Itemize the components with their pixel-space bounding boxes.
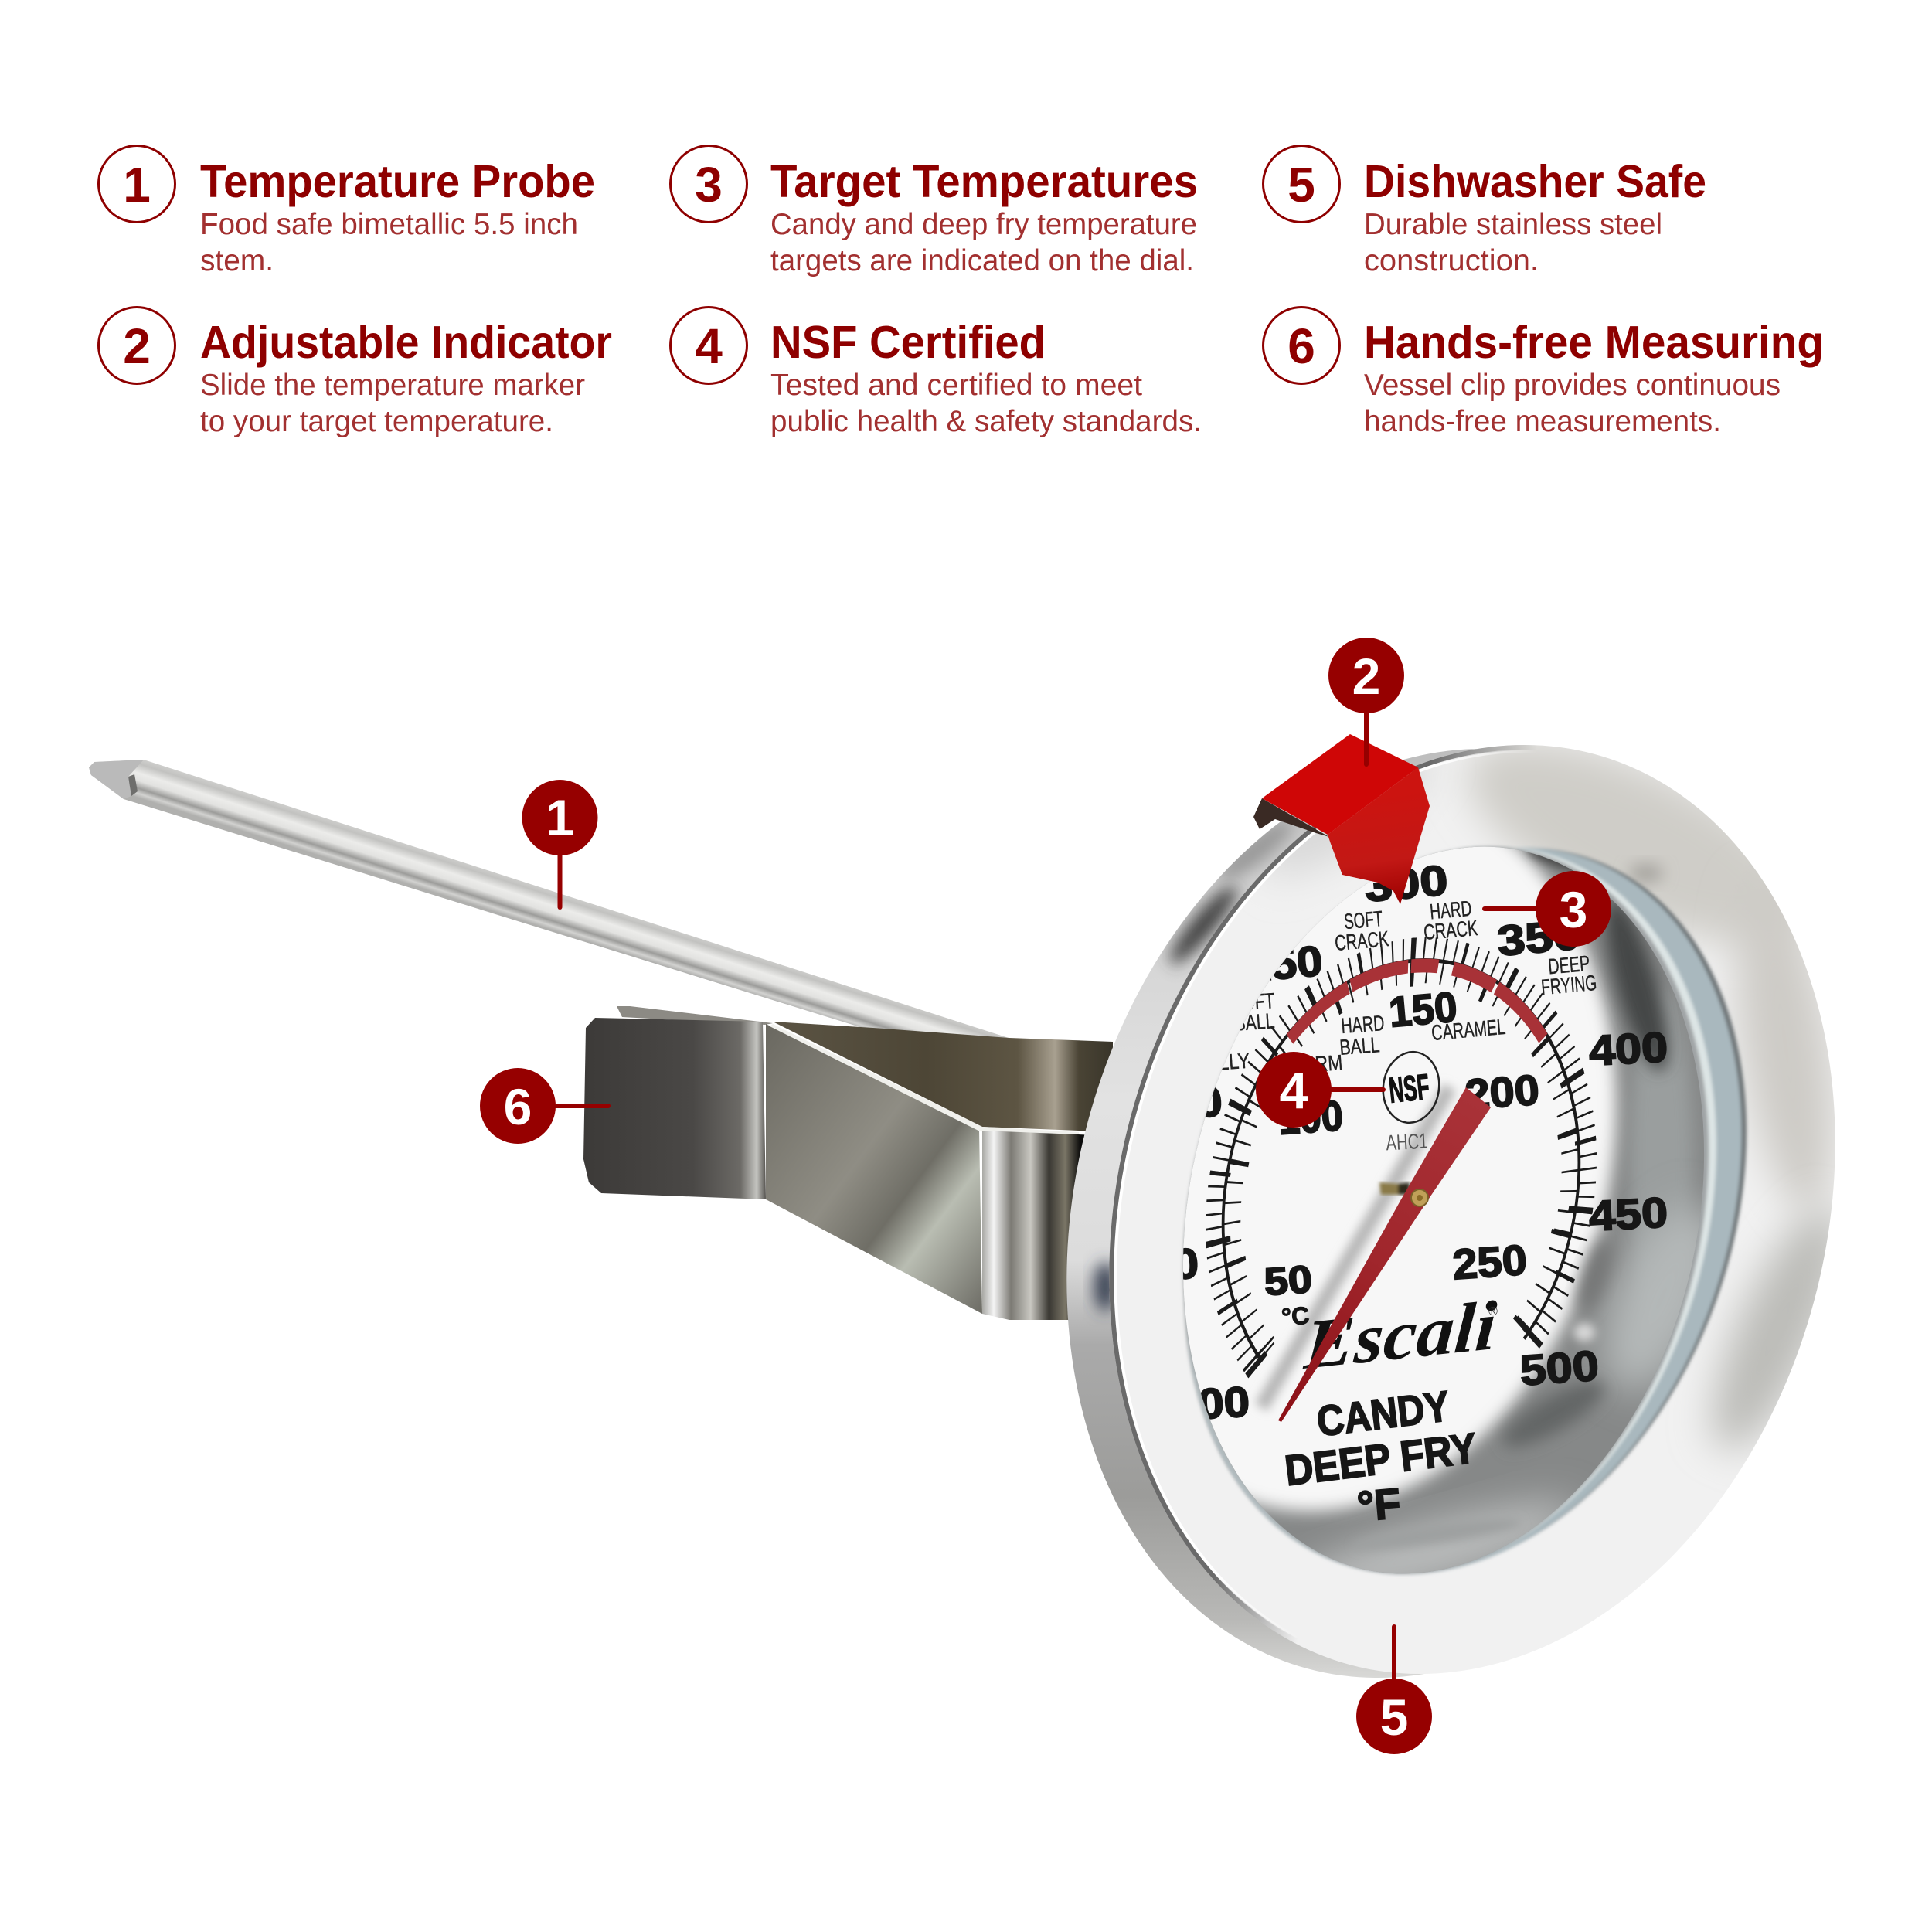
callout 6: 6 — [504, 1078, 532, 1135]
Escali brand logo: Escali — [1301, 1286, 1499, 1384]
candy stage labels: HARD — [1429, 896, 1472, 923]
feature list — [99, 145, 1824, 438]
front bezel — [1109, 745, 1835, 1674]
red adjustable marker — [1253, 734, 1430, 904]
heading: Dishwasher Safe: Dishwasher Safe — [1364, 156, 1706, 207]
fahrenheit and celsius numerals: °C — [1281, 1301, 1310, 1331]
description: Vessel clip provides continuous — [1364, 369, 1781, 402]
callout 4 — [1256, 1052, 1383, 1128]
fahrenheit and celsius numerals: 500 — [1519, 1342, 1600, 1395]
candy stage labels: SOFT — [1343, 906, 1383, 934]
number circle 1 — [99, 145, 175, 223]
description: Slide the temperature marker — [200, 369, 585, 402]
fahrenheit and celsius numerals: 450 — [1587, 1188, 1669, 1240]
heading: Target Temperatures: Target Temperatures — [770, 156, 1198, 207]
description: targets are indicated on the dial. — [770, 244, 1194, 277]
candy stage labels: HARD — [1340, 1011, 1385, 1038]
feature 3: target temperatures — [671, 145, 1198, 277]
description: public health & safety standards. — [770, 405, 1202, 438]
infographic canvas — [89, 145, 1835, 1754]
pivot pin — [1379, 1182, 1410, 1195]
candy stage labels: CRACK — [1334, 927, 1390, 955]
description: to your target temperature. — [200, 405, 553, 438]
candy stage labels: JELLY — [1196, 1049, 1251, 1076]
dial title — [1285, 1389, 1475, 1521]
number circle 5 — [1263, 145, 1340, 223]
fahrenheit and celsius numerals: 350 — [1495, 910, 1583, 965]
description: Food safe bimetallic 5.5 inch — [200, 208, 578, 241]
number circle 3: 3 — [695, 157, 723, 213]
callout 5: 5 — [1380, 1689, 1408, 1746]
callout 3 — [1485, 871, 1611, 947]
candy stage labels — [1222, 901, 1597, 1071]
NSF logo — [1382, 1051, 1440, 1124]
description — [200, 369, 585, 438]
dial opening inner wall and glass rim — [1087, 768, 1844, 1654]
red needle — [1278, 1087, 1491, 1422]
feature 4: NSF certified — [671, 308, 1202, 438]
fahrenheit and celsius numerals: 300 — [1362, 855, 1450, 911]
candy stage labels: DEEP — [1547, 951, 1590, 978]
description: Tested and certified to meet — [770, 369, 1142, 402]
candy stage labels: BALL — [1338, 1032, 1380, 1060]
feature 2: adjustable indicator — [99, 308, 612, 438]
callout 2 — [1328, 638, 1404, 764]
number circle 6 — [1263, 308, 1340, 383]
callout 1 — [522, 780, 598, 907]
candy stage labels: CRACK — [1423, 916, 1479, 944]
fahrenheit and celsius numerals: 50 — [1263, 1257, 1314, 1304]
description: stem. — [200, 244, 274, 277]
model number: AHC1 — [1386, 1129, 1428, 1155]
description — [1364, 208, 1662, 277]
number circle 5: 5 — [1287, 157, 1315, 213]
callout 4: 4 — [1280, 1062, 1308, 1119]
heading: Temperature Probe: Temperature Probe — [200, 156, 595, 207]
number circle 6: 6 — [1287, 318, 1315, 374]
number circle 3 — [671, 145, 747, 223]
fahrenheit and celsius numerals: 100 — [1171, 1377, 1251, 1430]
needle hub — [1411, 1189, 1428, 1206]
dial face — [1182, 847, 1704, 1573]
heading: Hands-free Measuring: Hands-free Measuring — [1364, 317, 1824, 368]
candy stage labels: FRYING — [1540, 971, 1597, 999]
dial housing side wall — [1066, 749, 1477, 1678]
red candy temperature band — [1286, 958, 1547, 1044]
dial title: DEEP FRY — [1282, 1423, 1479, 1495]
dial title: °F — [1355, 1479, 1403, 1530]
callout 1: 1 — [546, 789, 574, 846]
description: construction. — [1364, 244, 1539, 277]
thermometer illustration — [89, 662, 1932, 1757]
Escali brand logo: ® — [1488, 1305, 1498, 1318]
callout 3: 3 — [1560, 881, 1587, 938]
fahrenheit and celsius numerals: 200 — [1464, 1066, 1541, 1118]
candy stage labels: FIRM — [1298, 1050, 1343, 1077]
fahrenheit and celsius numerals: 400 — [1587, 1022, 1669, 1075]
fahrenheit and celsius numerals: 100 — [1277, 1091, 1345, 1144]
fahrenheit and celsius numerals: 150 — [1120, 1239, 1200, 1291]
number circle 2 — [99, 308, 175, 383]
fahrenheit and celsius numerals: 200 — [1144, 1077, 1224, 1130]
description — [770, 208, 1197, 277]
candy stage labels: SOFT — [1230, 988, 1275, 1015]
Escali brand logo — [1303, 1300, 1498, 1369]
gauge scale — [1206, 937, 1597, 1379]
description — [770, 369, 1202, 438]
fahrenheit and celsius numerals — [1120, 855, 1669, 1430]
callouts — [480, 638, 1611, 1754]
description: hands-free measurements. — [1364, 405, 1721, 438]
description — [200, 208, 578, 277]
heading: Adjustable Indicator: Adjustable Indicator — [200, 317, 612, 368]
fahrenheit and celsius numerals: 250 — [1243, 937, 1325, 991]
heading: NSF Certified: NSF Certified — [770, 317, 1046, 368]
callout 5 — [1356, 1627, 1432, 1754]
callout 6 — [480, 1068, 608, 1144]
feature 1: temperature probe — [99, 145, 595, 277]
description — [1364, 369, 1781, 438]
number circle 4 — [671, 308, 747, 383]
number circle 2: 2 — [123, 318, 151, 374]
dial title: CANDY — [1315, 1382, 1452, 1445]
callout 2: 2 — [1352, 648, 1380, 705]
feature 6: hands-free measuring — [1263, 308, 1824, 438]
description: Candy and deep fry temperature — [770, 208, 1197, 241]
fahrenheit and celsius numerals: 150 — [1387, 982, 1459, 1036]
temperature probe stem — [89, 760, 1097, 1066]
vessel clip — [583, 1006, 1113, 1320]
NSF logo: NSF — [1387, 1066, 1431, 1111]
feature 5: dishwasher safe — [1263, 145, 1706, 277]
candy stage labels: CARAMEL — [1430, 1015, 1506, 1045]
candy stage labels: BALL — [1233, 1009, 1275, 1036]
number circle 1: 1 — [123, 157, 151, 213]
fahrenheit and celsius numerals: 250 — [1451, 1236, 1529, 1288]
number circle 4: 4 — [695, 318, 723, 374]
description: Durable stainless steel — [1364, 208, 1662, 241]
